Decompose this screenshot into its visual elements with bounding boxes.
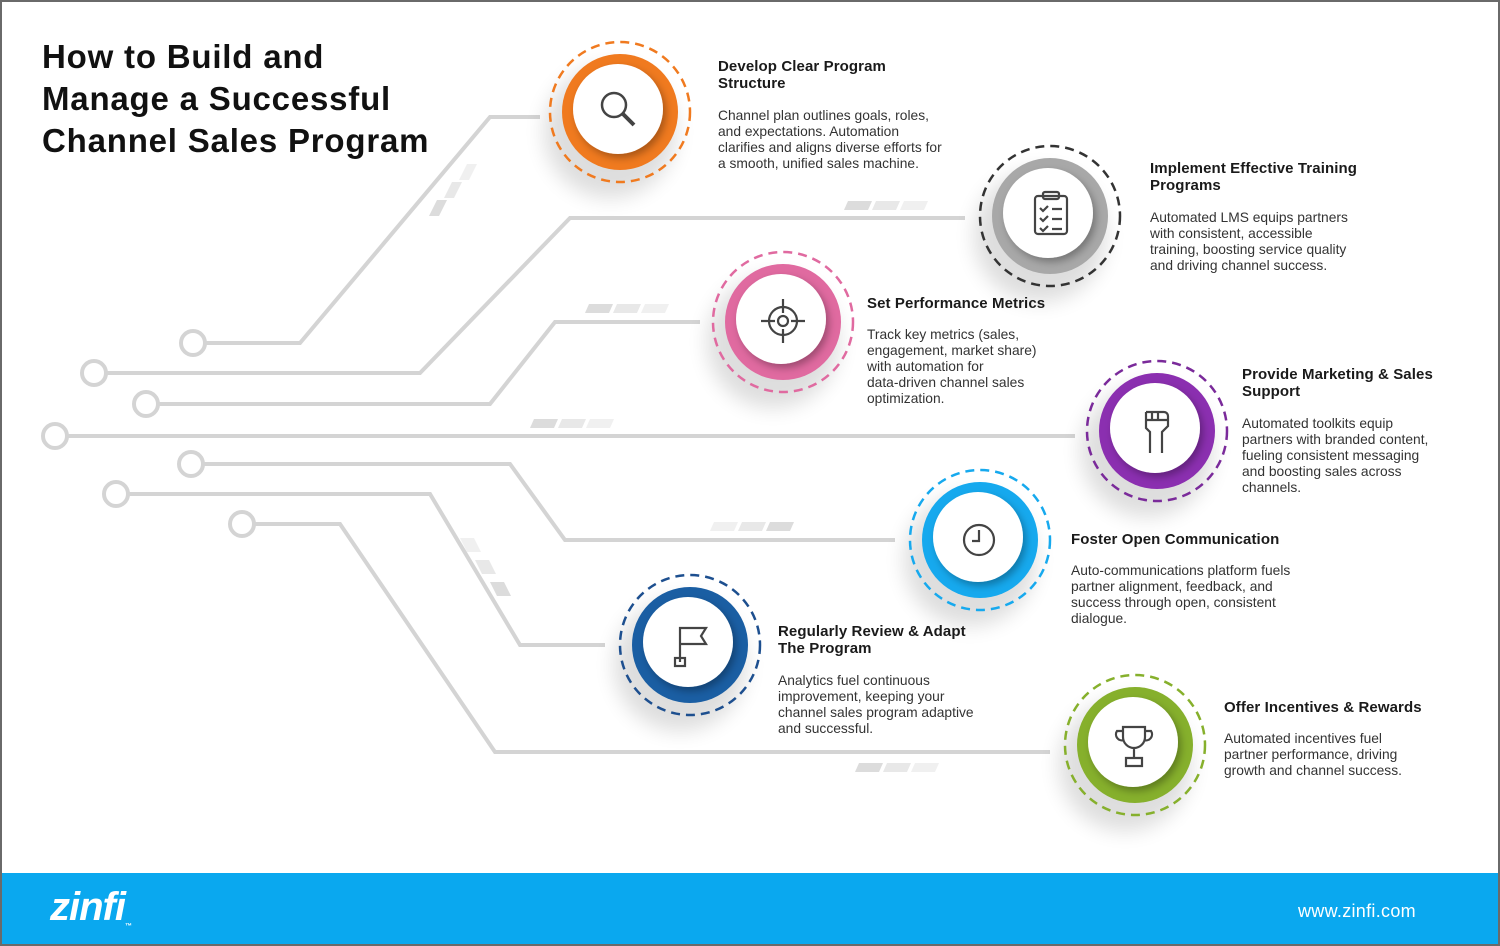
text: training: with consistent, accessible — [1150, 226, 1313, 241]
text: metrics — [867, 295, 1045, 406]
icon: target — [761, 299, 805, 343]
text: review: improvement, keeping your — [778, 689, 944, 704]
text: marketing support: Provide Marketing & Sales — [1242, 366, 1433, 383]
text: communication — [1071, 531, 1290, 626]
text: review: and successful. — [778, 721, 873, 736]
icon: clipboard — [1035, 192, 1067, 234]
title: Manage a Successful — [42, 80, 391, 117]
text: incentives — [1224, 699, 1422, 778]
text: training — [1150, 160, 1357, 273]
title — [42, 38, 429, 159]
title: Channel Sales Program — [42, 122, 429, 159]
text: incentives: Automated incentives fuel — [1224, 731, 1382, 746]
text: training: Automated LMS equips partners — [1150, 210, 1348, 225]
text: incentives: growth and channel success. — [1224, 763, 1402, 778]
text: develop clear program structure: Channel plan outlines goals, roles, — [718, 108, 929, 123]
text: communication: dialogue. — [1071, 611, 1127, 626]
text: develop clear program structure — [718, 58, 942, 171]
text: communication: success through open, consistent — [1071, 595, 1276, 610]
text: metrics: Track key metrics (sales, — [867, 327, 1019, 342]
icon: flag — [675, 628, 706, 666]
circle: navy — [614, 575, 760, 731]
text: marketing support: channels. — [1242, 480, 1301, 495]
text: training: training, boosting service quality — [1150, 242, 1346, 257]
circle: orange — [544, 42, 690, 198]
text: metrics: with automation for — [867, 359, 984, 374]
circle: green — [1059, 675, 1205, 831]
text: marketing support — [1242, 366, 1433, 495]
text: metrics: data-driven channel sales — [867, 375, 1024, 390]
icon: trophy — [1116, 727, 1152, 766]
text: metrics: Set Performance Metrics — [867, 295, 1045, 312]
text: incentives: partner performance, driving — [1224, 747, 1397, 762]
text: review: channel sales program adaptive — [778, 705, 974, 720]
text: communication: partner alignment, feedback, and — [1071, 579, 1273, 594]
text: develop clear program structure: and expectations. Automation — [718, 124, 899, 139]
circle: purple — [1081, 361, 1227, 517]
text: develop clear program structure: a smooth, unified sales machine. — [718, 156, 919, 171]
text: review: The Program — [778, 640, 872, 657]
text: marketing support: Automated toolkits equip — [1242, 416, 1393, 431]
text: communication: Foster Open Communication — [1071, 531, 1279, 548]
text: develop clear program structure: Structure — [718, 75, 786, 92]
text: review: Analytics fuel continuous — [778, 673, 930, 688]
text: training: Programs — [1150, 177, 1221, 194]
text: review — [778, 623, 974, 736]
text: develop clear program structure: clarifies and aligns diverse efforts for — [718, 140, 942, 155]
text: marketing support: Support — [1242, 383, 1300, 400]
url: www.zinfi.com — [1298, 901, 1416, 921]
text: marketing support: partners with branded content, — [1242, 432, 1428, 447]
text: incentives: Offer Incentives & Rewards — [1224, 699, 1422, 716]
icon: clock — [964, 525, 994, 555]
text: marketing support: fueling consistent messaging — [1242, 448, 1419, 463]
icon: magnifier — [602, 93, 634, 125]
text: training: Implement Effective Training — [1150, 160, 1357, 177]
logo: zinfi™ — [50, 885, 131, 930]
text: review: Regularly Review & Adapt — [778, 623, 966, 640]
title: How to Build and — [42, 38, 324, 75]
circle: pink — [707, 252, 853, 408]
text: develop clear program structure: Develop Clear Program — [718, 58, 886, 75]
text: marketing support: and boosting sales across — [1242, 464, 1402, 479]
text: metrics: engagement, market share) — [867, 343, 1036, 358]
text: communication: Auto-communications platform fuels — [1071, 563, 1290, 578]
text: metrics: optimization. — [867, 391, 944, 406]
circle: gray — [974, 146, 1120, 302]
text: training: and driving channel success. — [1150, 258, 1327, 273]
footer — [2, 873, 1498, 944]
icon: fist — [1146, 412, 1168, 453]
circle: blue — [904, 470, 1050, 626]
